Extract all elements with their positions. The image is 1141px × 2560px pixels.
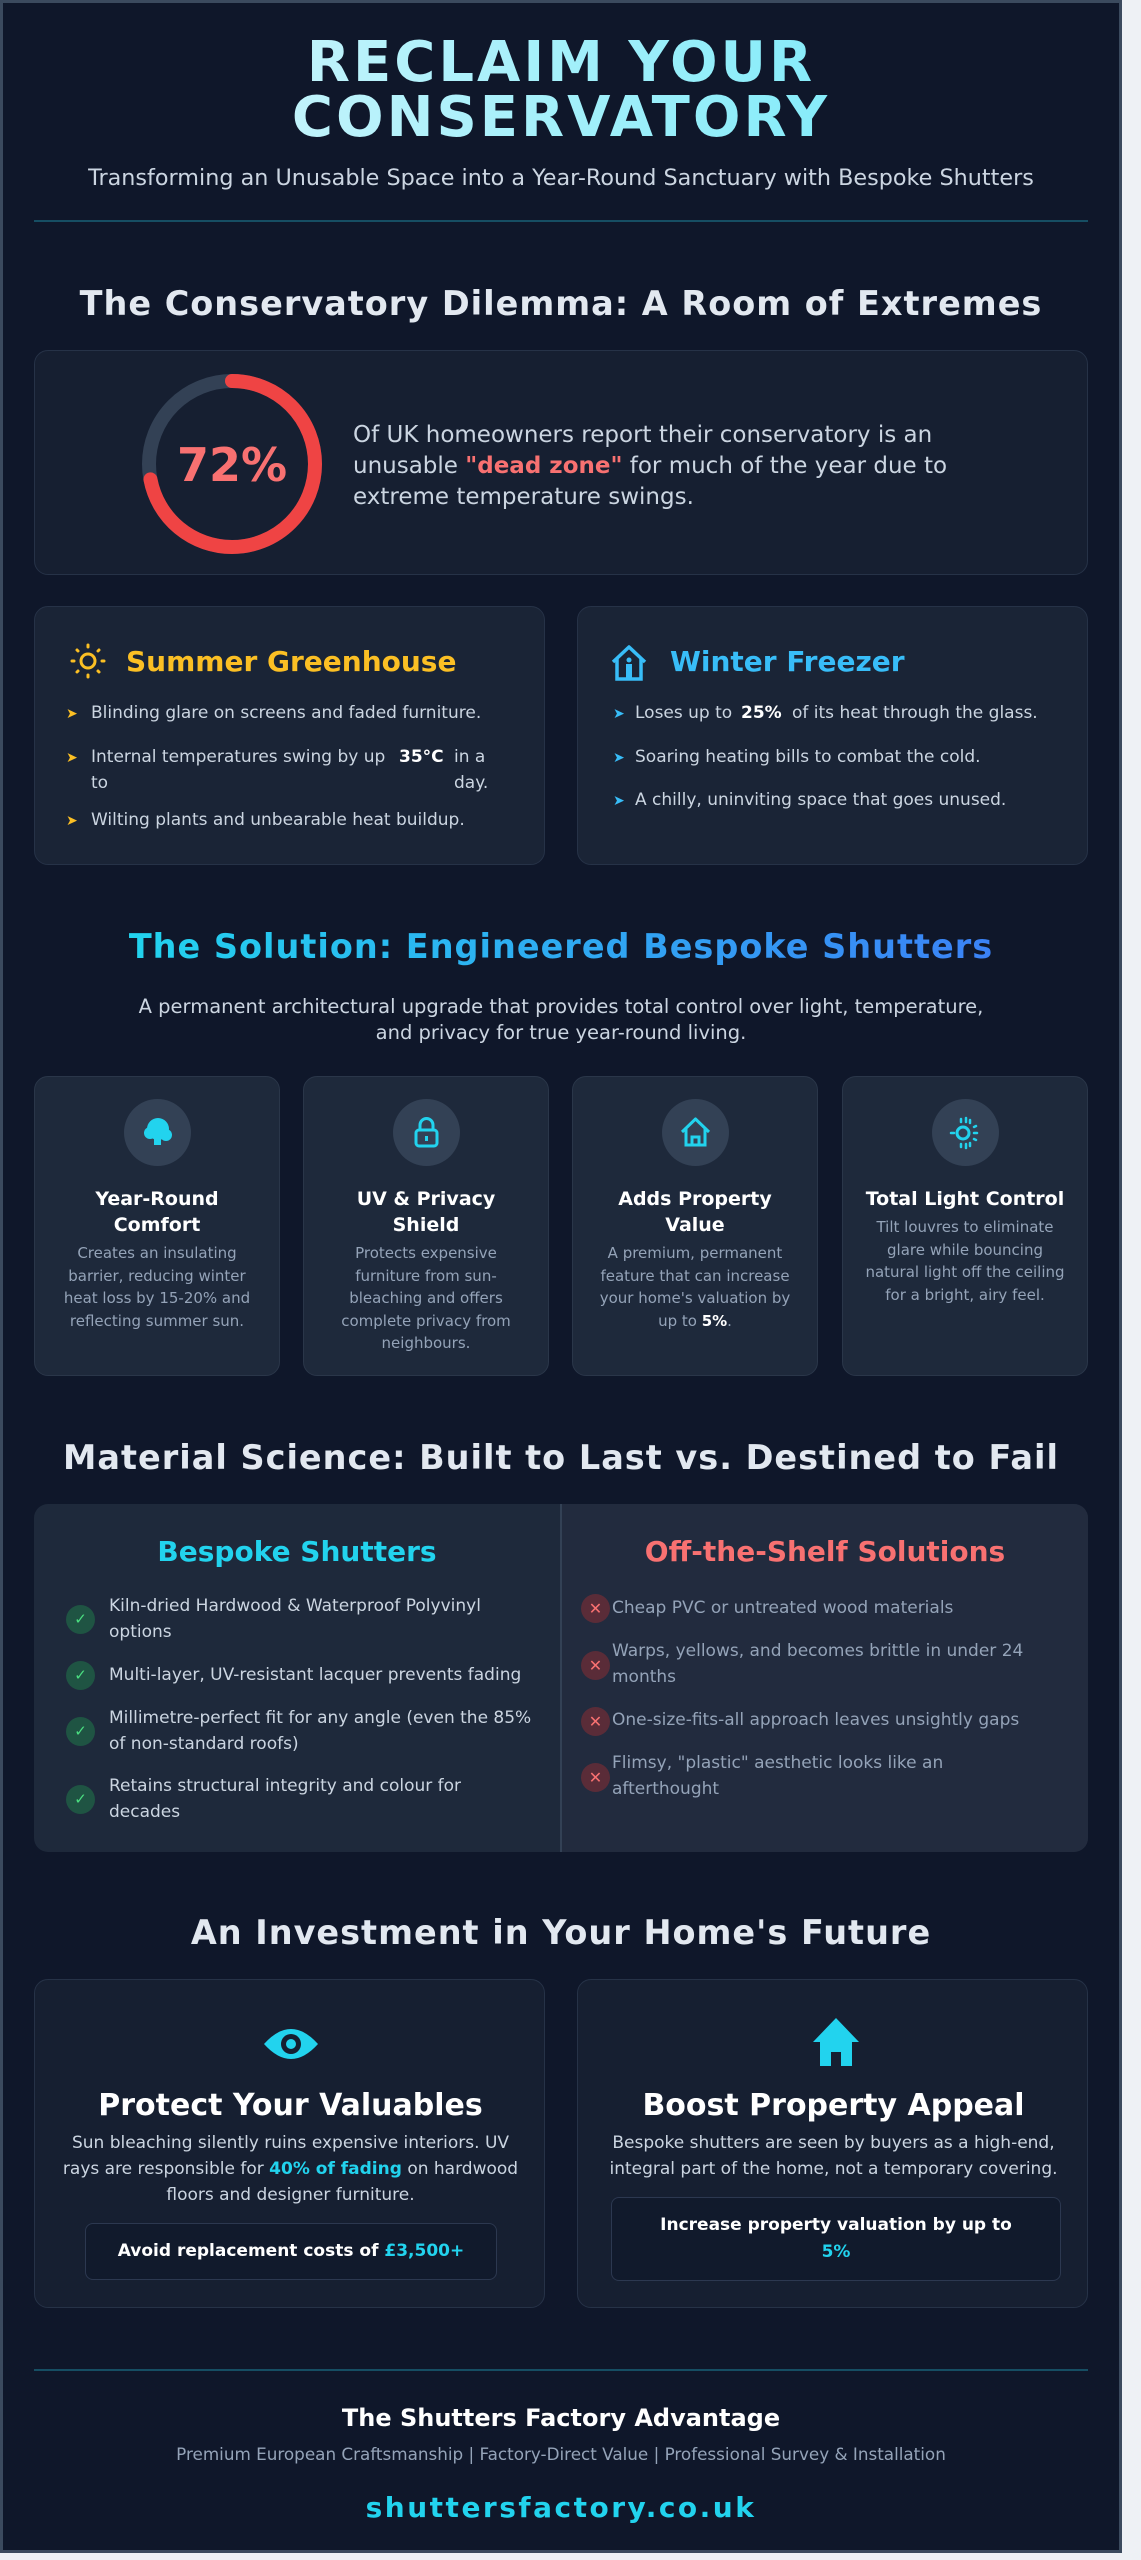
card: uv & privacy: Protects expensive furniture from sun-bleaching and offers complete privacy from neighbours. — [341, 1244, 511, 1352]
column: bespoke: Retains structural integrity and colour for decades — [109, 1776, 461, 1822]
card: year-round comfort: Year-Round — [95, 1188, 219, 1210]
icon: house — [662, 1099, 729, 1166]
column: off-the-shelf: Flimsy, "plastic" aesthetic looks like an afterthought — [612, 1753, 943, 1799]
column: bespoke: ✓ — [74, 1790, 87, 1808]
card: protect valuables: Sun bleaching silently ruins expensive interiors. UV rays are responsible for 40% of fading on hardwood floors and designer furniture. — [63, 2133, 518, 2205]
panel: comparison — [34, 1504, 1088, 1852]
icon: lock — [393, 1099, 460, 1166]
panel: winter freezer: of its heat through the glass. — [792, 703, 1038, 723]
title — [3, 35, 1119, 145]
column: off-the-shelf: ✕ — [589, 1712, 602, 1731]
card: protect valuables: Protect Your Valuables — [98, 2088, 483, 2123]
solution subtitle: and privacy for true year-round living. — [376, 1021, 746, 1044]
footer: Premium European Craftsmanship | Factory-Direct Value | Professional Survey & Installation — [176, 2444, 946, 2464]
card: property value: Adds Property — [618, 1188, 772, 1210]
panel: summer greenhouse: day. — [454, 773, 488, 793]
card: uv & privacy: Shield — [393, 1214, 459, 1236]
icon: eye — [264, 2029, 318, 2059]
solution subtitle: A permanent architectural upgrade that provides total control over light, temperature, — [139, 995, 983, 1018]
panel: summer greenhouse: ➤ — [66, 750, 78, 766]
card: boost appeal — [577, 1979, 1088, 2308]
card: property value: Value — [665, 1214, 725, 1236]
panel: summer greenhouse: Internal temperatures swing by up — [91, 747, 385, 767]
panel: winter freezer: 25% — [741, 703, 782, 723]
stat text: Of UK homeowners report their conservatory is an unusable "dead zone" for much of the year due to extreme temperature swings. — [353, 422, 947, 510]
icon: light — [932, 1099, 999, 1166]
solution subtitle — [138, 995, 983, 1044]
card: year-round comfort — [34, 1076, 280, 1376]
column: off-the-shelf: ✕ — [589, 1656, 602, 1675]
panel: summer greenhouse: ➤ — [66, 813, 78, 829]
column: bespoke: ✓ — [74, 1666, 87, 1684]
panel: summer greenhouse: 35°C — [399, 747, 444, 767]
card: year-round comfort: Comfort — [114, 1214, 200, 1236]
panel: winter freezer — [577, 606, 1088, 865]
column: bespoke: Bespoke Shutters — [157, 1535, 437, 1568]
column: bespoke: Millimetre-perfect fit for any angle (even the 85% of non-standard roofs) — [109, 1708, 531, 1754]
panel: summer greenhouse: in a — [454, 747, 485, 767]
column: bespoke: Multi-layer, UV-resistant lacquer prevents fading — [109, 1665, 521, 1685]
panel: winter freezer: Soaring heating bills to combat the cold. — [635, 747, 981, 767]
column: bespoke: ✓ — [74, 1722, 87, 1740]
footer — [176, 2404, 946, 2524]
card: boost appeal: Bespoke shutters are seen by buyers as a high-end, integral part of the home, not a temporary covering. — [609, 2133, 1058, 2179]
icon: house solid — [813, 2018, 859, 2066]
heading: investment: An Investment in Your Home's Future — [191, 1913, 931, 1952]
panel: 72% stat — [34, 350, 1088, 575]
callout: replacement costs — [85, 2223, 497, 2280]
icon: sun — [70, 644, 106, 678]
panel: winter freezer: ➤ — [613, 706, 625, 722]
column: off-the-shelf: ✕ — [589, 1599, 602, 1618]
subtitle: Transforming an Unusable Space into a Year-Round Sanctuary with Bespoke Shutters — [88, 165, 1034, 191]
column: bespoke — [66, 1535, 531, 1822]
title: RECLAIM YOUR — [307, 30, 815, 95]
panel: summer greenhouse: Wilting plants and unbearable heat buildup. — [91, 810, 465, 830]
heading: Winter Freezer — [670, 645, 905, 678]
panel: summer greenhouse: to — [91, 773, 108, 793]
panel: summer greenhouse: ➤ — [66, 706, 78, 722]
column: off-the-shelf: ✕ — [589, 1768, 602, 1787]
column: off-the-shelf: One-size-fits-all approach leaves unsightly gaps — [612, 1710, 1019, 1730]
column: off-the-shelf: Off-the-Shelf Solutions — [645, 1535, 1005, 1568]
donut chart: 72% — [177, 438, 287, 492]
heading: Summer Greenhouse — [126, 645, 456, 678]
panel: winter freezer: ➤ — [613, 750, 625, 766]
column: bespoke: ✓ — [74, 1610, 87, 1628]
heading: solution: The Solution: Engineered Bespoke Shutters — [129, 927, 993, 966]
callout: valuation — [611, 2197, 1061, 2281]
panel: summer greenhouse — [34, 606, 545, 865]
footer: shuttersfactory.co.uk — [366, 2491, 756, 2524]
card: light control: Total Light Control — [866, 1188, 1064, 1210]
title: CONSERVATORY — [292, 85, 830, 150]
footer: The Shutters Factory Advantage — [342, 2404, 780, 2432]
card: boost appeal: Boost Property Appeal — [642, 2088, 1025, 2123]
panel: winter freezer: Loses up to — [635, 703, 732, 723]
icon: comfort — [124, 1099, 191, 1166]
panel: winter freezer: A chilly, uninviting space that goes unused. — [635, 790, 1006, 810]
callout: valuation: 5% — [822, 2242, 850, 2262]
card: light control — [842, 1076, 1088, 1376]
column: off-the-shelf: Warps, yellows, and becomes brittle in under 24 months — [612, 1641, 1023, 1687]
column: off-the-shelf: Cheap PVC or untreated wood materials — [612, 1598, 953, 1618]
card: property value: A premium, permanent feature that can increase your home's valuation by up to 5%. — [600, 1244, 790, 1330]
column: bespoke: Kiln-dried Hardwood & Waterproof Polyvinyl options — [109, 1596, 481, 1642]
callout: valuation: Increase property valuation by up to — [660, 2215, 1012, 2235]
column: off-the-shelf — [581, 1535, 1023, 1799]
panel: summer greenhouse: Blinding glare on screens and faded furniture. — [91, 703, 481, 723]
card: uv & privacy — [303, 1076, 549, 1376]
card: protect valuables — [34, 1979, 545, 2308]
heading: dilemma: The Conservatory Dilemma: A Room of Extremes — [80, 284, 1042, 323]
icon: house — [612, 645, 646, 681]
card: property value — [572, 1076, 818, 1376]
card: uv & privacy: UV & Privacy — [357, 1188, 495, 1210]
heading: material science: Material Science: Built to Last vs. Destined to Fail — [63, 1438, 1059, 1477]
card: light control: Tilt louvres to eliminate glare while bouncing natural light off the ceiling for a bright, airy feel. — [865, 1218, 1065, 1304]
card: year-round comfort: Creates an insulating barrier, reducing winter heat loss by 15-20% and reflecting summer sun. — [64, 1244, 250, 1330]
callout: replacement costs: Avoid replacement costs of £3,500+ — [118, 2241, 464, 2261]
panel: winter freezer: ➤ — [613, 793, 625, 809]
donut chart — [142, 374, 322, 554]
